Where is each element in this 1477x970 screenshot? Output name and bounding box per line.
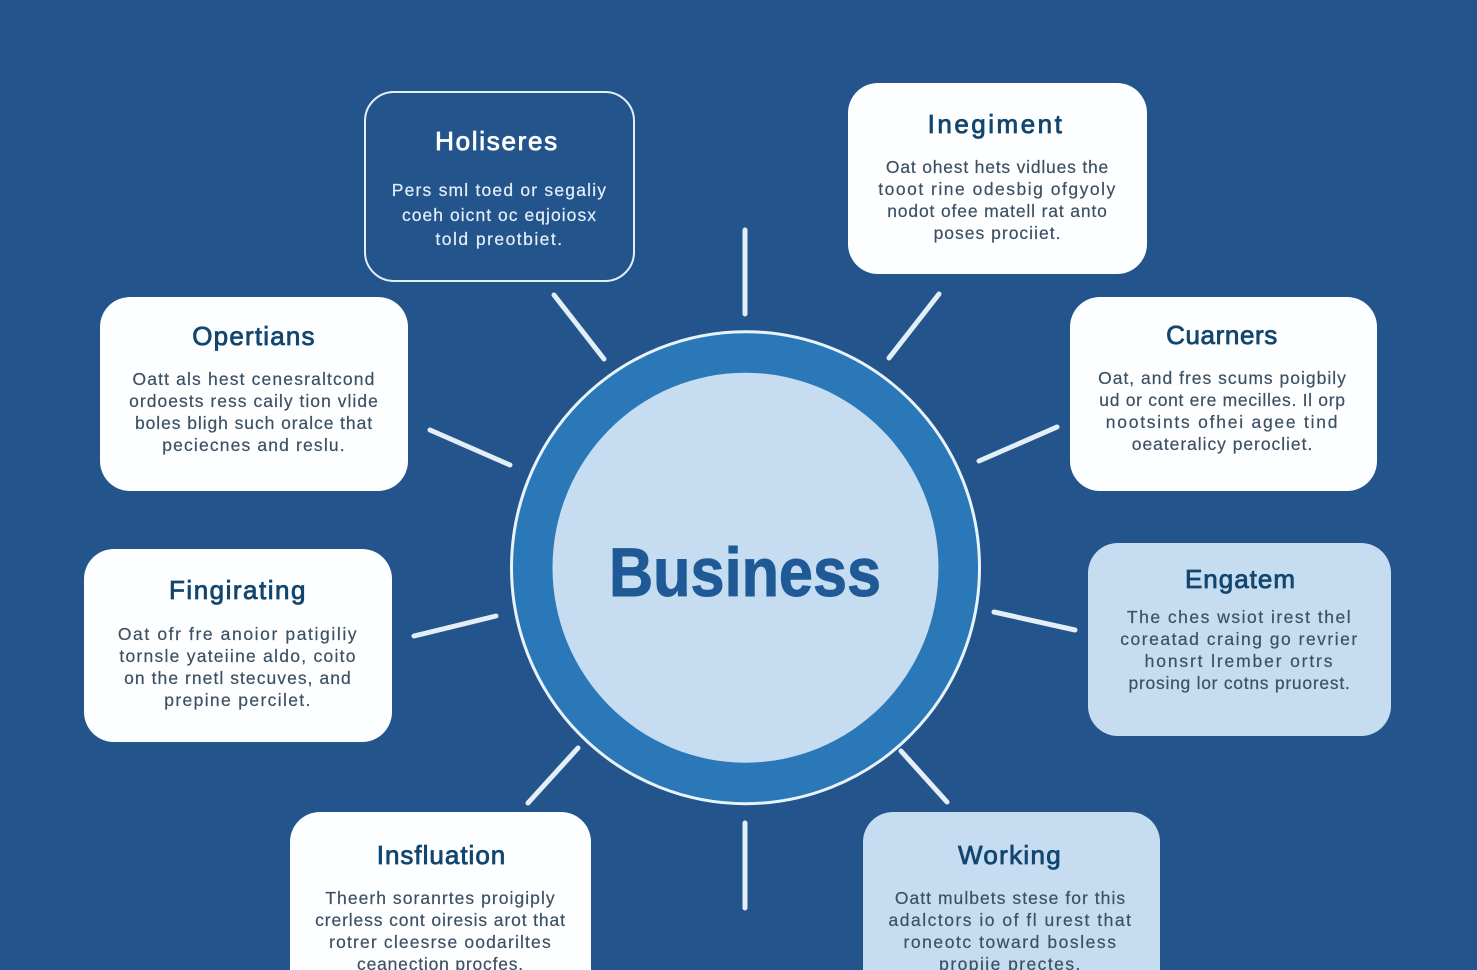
card: Holiseres bbox=[364, 91, 635, 282]
card: Opertians bbox=[100, 297, 408, 491]
card: Insfluation: Theerh soranrtes proigiply bbox=[325, 888, 556, 908]
card: Holiseres: Holiseres bbox=[435, 126, 559, 156]
spokes and central circle: Business bbox=[609, 534, 881, 611]
card: Fingirating: on the rnetl stecuves, and bbox=[124, 668, 352, 688]
card: Inegiment: tooot rine odesbig ofgyoly bbox=[878, 179, 1117, 199]
card: Inegiment: nodot ofee matell rat anto bbox=[887, 201, 1108, 221]
card: Inegiment: poses prociiet. bbox=[934, 223, 1061, 243]
card: Insfluation: Insfluation bbox=[377, 840, 506, 870]
card: Inegiment: Inegiment bbox=[928, 109, 1064, 139]
card: Inegiment: Oat ohest hets vidlues the bbox=[886, 157, 1109, 177]
card: Holiseres: Pers sml toed or segaliy bbox=[392, 180, 607, 200]
card: Fingirating: prepine percilet. bbox=[164, 690, 312, 710]
card: Engatem: prosing lor cotns pruorest. bbox=[1128, 673, 1351, 693]
card: Working: Oatt mulbets stese for this bbox=[895, 888, 1126, 908]
card: Engatem: The ches wsiot irest thel bbox=[1127, 607, 1352, 627]
card: Fingirating: Oat ofr fre anoior patigiliy bbox=[118, 624, 358, 644]
card: Cuarners: oeateralicy perocliet. bbox=[1132, 434, 1313, 454]
card: Holiseres: told preotbiet. bbox=[435, 229, 564, 249]
card: Inegiment bbox=[848, 83, 1147, 274]
card: Fingirating: Fingirating bbox=[169, 575, 307, 605]
card: Fingirating bbox=[84, 549, 392, 742]
card: Engatem bbox=[1088, 543, 1391, 736]
card: Engatem: coreatad craing go revrier bbox=[1120, 629, 1359, 649]
card: Insfluation bbox=[290, 812, 591, 970]
card: Engatem: honsrt lrember ortrs bbox=[1145, 651, 1334, 671]
card: Cuarners: ud or cont ere mecilles. Il orp bbox=[1099, 390, 1346, 410]
card: Cuarners: Oat, and fres scums poigbily bbox=[1098, 368, 1347, 388]
card: Fingirating: tornsle yateiine aldo, coito bbox=[119, 646, 357, 666]
card: Insfluation: rotrer cleesrse oodariltes bbox=[329, 932, 552, 952]
card: Working: Working bbox=[958, 840, 1062, 870]
card: Working: roneotc toward bosless bbox=[903, 932, 1118, 952]
card: Cuarners: nootsints ofhei agee tind bbox=[1106, 412, 1339, 432]
card: Cuarners bbox=[1070, 297, 1377, 491]
card: Engatem: Engatem bbox=[1185, 564, 1296, 594]
card: Opertians: boles bligh such oralce that bbox=[135, 413, 373, 433]
card: Cuarners: Cuarners bbox=[1166, 320, 1278, 350]
card: Opertians: Opertians bbox=[192, 321, 316, 351]
card: Insfluation: crerless cont oiresis arot that bbox=[315, 910, 566, 930]
card: Opertians: ordoests ress caily tion vlide bbox=[129, 391, 379, 411]
card: Opertians: Oatt als hest cenesraltcond bbox=[132, 369, 376, 389]
card: Opertians: peciecnes and reslu. bbox=[162, 435, 346, 455]
card: Holiseres: coeh oicnt oc eqjoiosx bbox=[402, 204, 597, 224]
card: Working bbox=[863, 812, 1160, 970]
card: Working: adalctors io of fl urest that bbox=[889, 910, 1132, 930]
